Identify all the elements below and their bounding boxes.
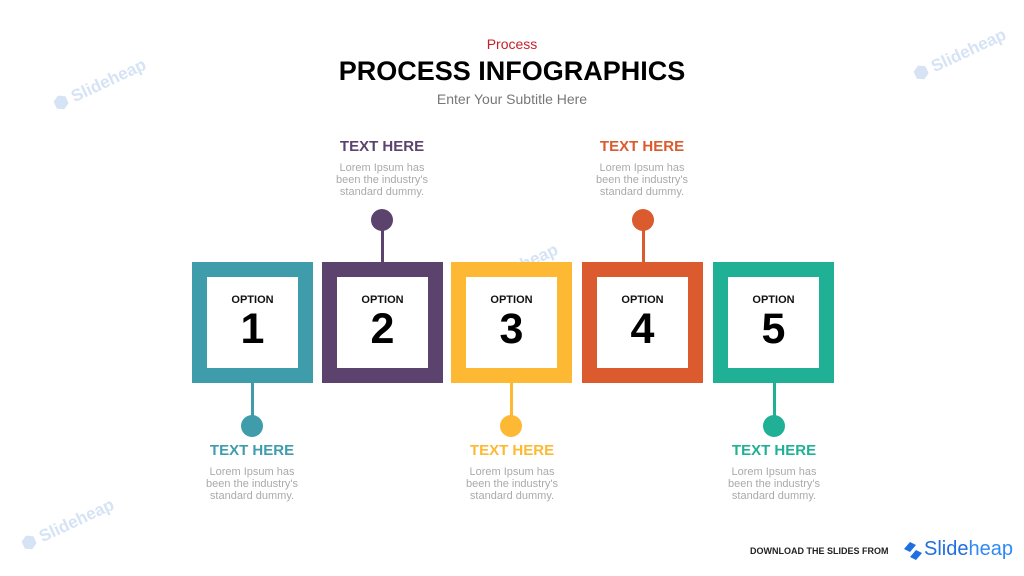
heading 1: TEXT HERE	[210, 442, 294, 459]
text 4	[596, 162, 688, 198]
text 5: been the industry's	[728, 478, 820, 490]
text 2	[336, 162, 428, 198]
dot 2	[371, 209, 393, 231]
option 3	[451, 262, 572, 502]
heading 3: TEXT HERE	[470, 442, 554, 459]
text 4: Lorem Ipsum has	[600, 162, 684, 174]
dot 5	[763, 415, 785, 437]
box 1	[192, 262, 313, 383]
box 3: 3	[500, 305, 523, 353]
box 3	[451, 262, 572, 383]
subtitle: Enter Your Subtitle Here	[437, 91, 587, 107]
text 5: Lorem Ipsum has	[732, 466, 816, 478]
connector 4	[642, 228, 645, 263]
box 1: OPTION	[231, 294, 274, 306]
box 3: OPTION	[490, 294, 533, 306]
option 4	[582, 138, 703, 383]
dot 3	[500, 415, 522, 437]
text 1: Lorem Ipsum has	[210, 466, 294, 478]
watermark: ⬢ Slideheap	[462, 240, 561, 299]
text 1: standard dummy.	[210, 490, 294, 502]
text 2: standard dummy.	[340, 186, 424, 198]
watermark: ⬢ Slideheap	[18, 495, 117, 554]
box 4: OPTION	[621, 294, 664, 306]
text 2: Lorem Ipsum has	[340, 162, 424, 174]
box 1: 1	[241, 305, 264, 353]
connector 2	[381, 228, 384, 263]
watermark: ⬢ Slideheap	[50, 55, 149, 114]
heading 2: TEXT HERE	[340, 138, 424, 155]
watermark: ⬢ Slideheap	[910, 25, 1009, 84]
box 4	[582, 262, 703, 383]
option 2	[322, 138, 443, 383]
box 5: OPTION	[752, 294, 795, 306]
box 5	[713, 262, 834, 383]
title: PROCESS INFOGRAPHICS	[339, 56, 685, 86]
box 2: 2	[371, 305, 394, 353]
text 1	[206, 466, 298, 502]
connector 3	[510, 383, 513, 423]
box 2: OPTION	[361, 294, 404, 306]
option 5	[713, 262, 834, 502]
dot 4	[632, 209, 654, 231]
text 3: standard dummy.	[470, 490, 554, 502]
text 3	[466, 466, 558, 502]
text 5	[728, 466, 820, 502]
footer credit: DOWNLOAD THE SLIDES FROM	[750, 546, 888, 556]
box 4: 4	[631, 305, 654, 353]
footer credit	[750, 538, 1013, 560]
option 1	[192, 262, 313, 502]
text 1: been the industry's	[206, 478, 298, 490]
footer credit: Slideheap	[924, 538, 1013, 560]
text 4: standard dummy.	[600, 186, 684, 198]
text 2: been the industry's	[336, 174, 428, 186]
text 3: Lorem Ipsum has	[470, 466, 554, 478]
heading 4: TEXT HERE	[600, 138, 684, 155]
text 5: standard dummy.	[732, 490, 816, 502]
box 5: 5	[762, 305, 785, 353]
connector 5	[773, 383, 776, 423]
box 2	[322, 262, 443, 383]
text 4: been the industry's	[596, 174, 688, 186]
dot 1	[241, 415, 263, 437]
text 3: been the industry's	[466, 478, 558, 490]
heading 5: TEXT HERE	[732, 442, 816, 459]
icon: slideheap logo	[904, 542, 922, 560]
connector 1	[251, 383, 254, 423]
kicker: Process	[487, 36, 537, 52]
